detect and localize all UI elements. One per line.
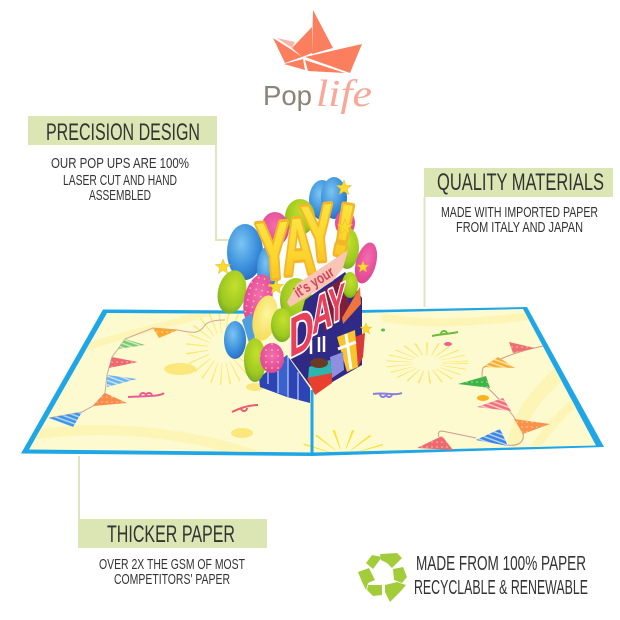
firework right xyxy=(399,349,455,377)
heading band xyxy=(78,519,267,548)
center fold xyxy=(310,390,314,455)
logo wordmark life: life xyxy=(316,73,372,115)
DAY lettering: Y xyxy=(328,271,345,336)
DAY lettering xyxy=(289,271,345,371)
heading band xyxy=(424,168,613,197)
icon: recycle arrows xyxy=(358,553,407,602)
it's your ribbon: it's your xyxy=(291,264,338,301)
squiggles xyxy=(128,331,458,412)
connector lines xyxy=(79,145,424,519)
YAY! lettering: ! xyxy=(326,188,361,272)
heading: THICKER PAPER xyxy=(107,521,235,548)
pop-up: birthday balloons and YAY xyxy=(214,177,381,403)
heading: PRECISION DESIGN xyxy=(46,119,200,146)
flag patterns xyxy=(49,328,178,427)
body text: LASER CUT AND HAND xyxy=(63,172,177,189)
bunting right xyxy=(417,342,550,450)
callout: quality materials xyxy=(424,168,613,236)
inner backing xyxy=(290,272,362,392)
YAY! lettering: Y xyxy=(298,186,340,279)
bunting left xyxy=(49,320,225,427)
body text xyxy=(51,155,189,204)
bunting string xyxy=(438,346,543,445)
body text xyxy=(99,556,245,588)
callout: thicker paper xyxy=(78,519,267,588)
flags xyxy=(49,412,82,427)
flag patterns xyxy=(417,342,550,450)
card outer border xyxy=(21,307,604,456)
balloons back xyxy=(227,177,381,322)
gift boxes and blue base xyxy=(259,287,365,403)
YAY! lettering: A xyxy=(279,200,317,292)
body text xyxy=(441,204,598,236)
logo wordmark Pop: Pop xyxy=(263,80,312,111)
bunting string xyxy=(49,320,225,418)
card inner surface xyxy=(29,309,596,452)
flags xyxy=(509,342,535,353)
firework bottom xyxy=(315,439,371,473)
DAY lettering: A xyxy=(312,279,332,347)
stars xyxy=(215,180,372,334)
dots xyxy=(164,328,489,438)
logo icon: origami boat xyxy=(273,10,362,73)
firework left xyxy=(197,322,249,374)
DAY lettering: D xyxy=(289,296,314,371)
heading band xyxy=(28,116,217,145)
recycling statement xyxy=(414,553,588,599)
body text: OVER 2X THE GSM OF MOST xyxy=(99,556,245,573)
callout: precision design xyxy=(28,116,217,204)
body text: OUR POP UPS ARE 100% xyxy=(51,155,189,172)
body text: COMPETITORS' PAPER xyxy=(114,571,230,588)
body text: ASSEMBLED xyxy=(89,187,151,204)
YAY! lettering: Y xyxy=(254,206,293,297)
wash bands xyxy=(30,312,578,455)
balloons front xyxy=(214,268,358,382)
pop-up card base xyxy=(21,307,604,456)
logo: Poplife xyxy=(263,10,372,115)
YAY! lettering xyxy=(254,186,361,297)
